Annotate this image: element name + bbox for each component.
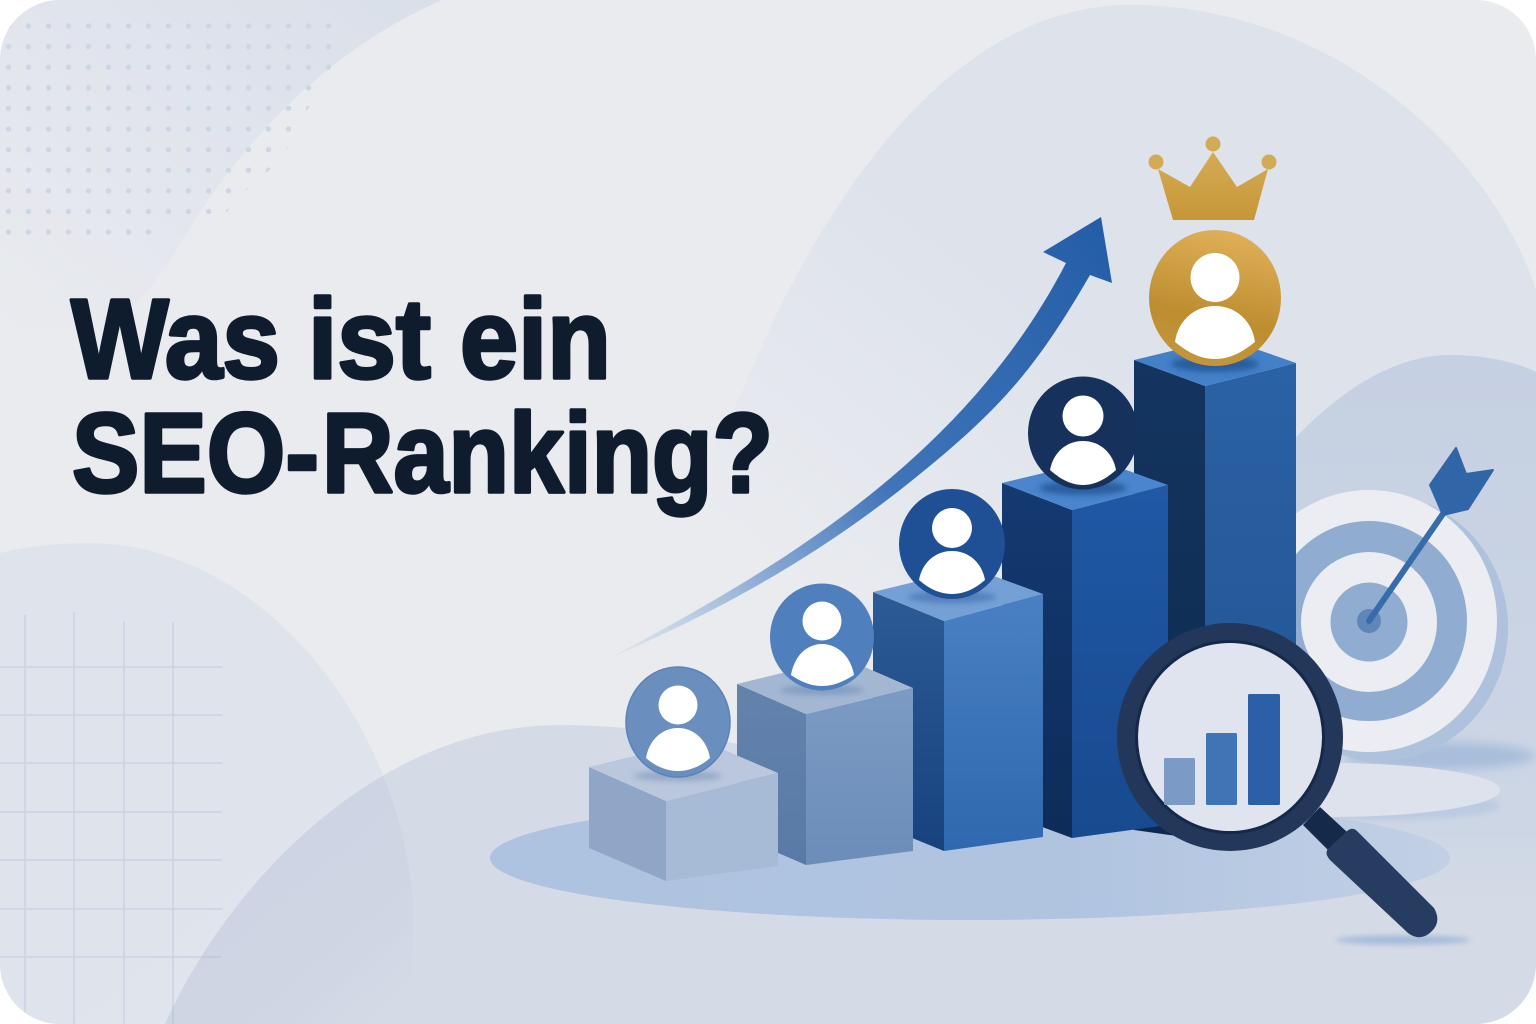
title line 2: Ranking? [322, 390, 773, 516]
title line 1: ist [308, 276, 431, 402]
bar 2 [737, 658, 913, 865]
user avatar 2 [770, 584, 874, 690]
bar 4 [1002, 460, 1168, 838]
bar 3 [873, 568, 1043, 851]
growth arrow [610, 217, 1112, 658]
title line 2: SEO- [72, 390, 319, 516]
lens [1117, 623, 1343, 851]
title [71, 276, 773, 516]
background shape: large upper-right blob [806, 5, 1536, 472]
title line 1 [70, 294, 606, 381]
grid lines [0, 612, 222, 1024]
user avatar 5 (gold) [1149, 230, 1281, 366]
bar 1 (lowest) [589, 740, 778, 881]
icon: crown [1148, 136, 1276, 220]
title line 1: ein [460, 276, 611, 402]
user avatar 4 [1028, 376, 1138, 490]
target with dart [1296, 447, 1508, 757]
title line 1: Was [71, 276, 280, 402]
background shape: bottom hill [165, 725, 1536, 1024]
ground shadows [490, 742, 1535, 944]
background shape: right hill [1296, 355, 1536, 828]
dot pattern [6, 24, 331, 235]
handle [1303, 807, 1437, 937]
background shape: top-left corner [0, 0, 442, 160]
user avatar 1 [626, 667, 730, 777]
user avatar 3 [899, 489, 1005, 599]
mini bar chart [1164, 694, 1280, 805]
icon: magnifying glass with bar chart [1117, 623, 1437, 937]
dart [1369, 448, 1493, 621]
background shape: bottom-left blob [0, 543, 413, 1024]
bar 5 (highest) [1134, 338, 1296, 840]
title line 2 [73, 408, 769, 518]
